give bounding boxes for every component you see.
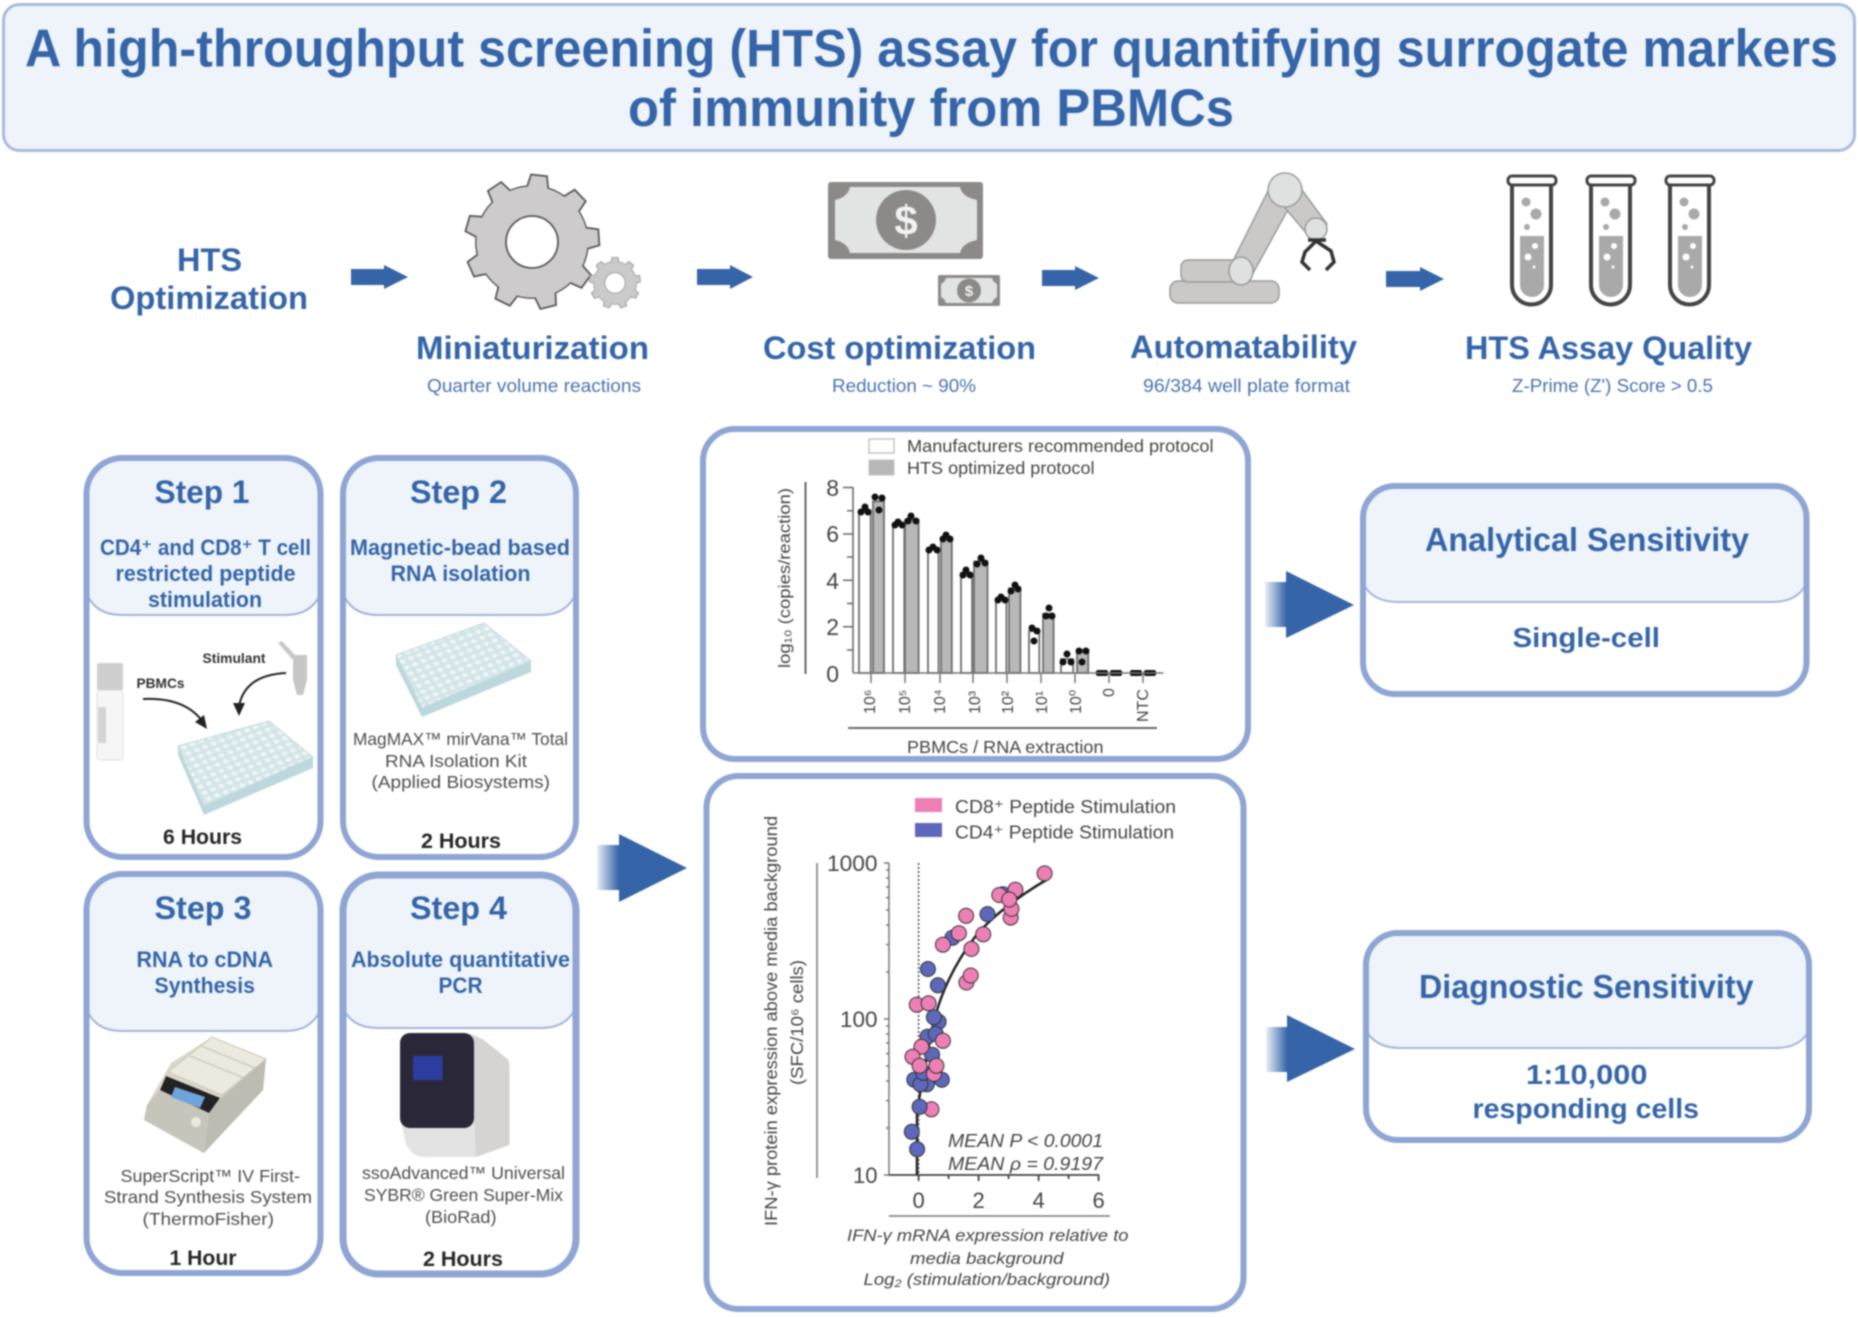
- panel: analytical sensitivity: [1363, 486, 1806, 694]
- CD8 points: [905, 866, 1052, 1117]
- label: Miniaturization: Miniaturization: [416, 330, 649, 366]
- panel: step 3: RNA to cDNA: [136, 947, 273, 972]
- arrow: to analytical sensitivity: [1265, 571, 1354, 638]
- arrow: to diagnostic sensitivity: [1266, 1015, 1355, 1082]
- x axis: NTC: [1135, 689, 1152, 722]
- panel: step 2: Step 2: [410, 474, 507, 510]
- y axis: 2: [826, 614, 839, 640]
- x axis: 6: [1092, 1188, 1105, 1213]
- heading: HTS Optimization: HTS: [177, 242, 242, 278]
- text: cDNA kit: SuperScript™ IV First-: [120, 1166, 300, 1186]
- label: 1 hour: 1 Hour: [170, 1247, 236, 1270]
- panel: step 3: Synthesis: [154, 973, 255, 998]
- title banner: [4, 4, 1854, 150]
- icon: thermal cycler: [144, 1037, 266, 1153]
- label: Cost optimization: Cost optimization: [763, 330, 1036, 366]
- icon: pipette tube: [278, 641, 307, 695]
- x axis: PBMCs / RNA extraction: [907, 737, 1104, 757]
- arrow: steps to charts: [597, 834, 687, 902]
- x axis: IFN-γ mRNA expression relative to: [847, 1226, 1128, 1245]
- statistics: [948, 1131, 1104, 1174]
- panel: analytical sensitivity: Single-cell: [1512, 622, 1660, 653]
- panel: step 2: RNA isolation: [390, 561, 530, 586]
- text: RNA kit: MagMAX™ mirVana™ Total: [353, 729, 568, 749]
- label: Miniaturization: Quarter volume reactions: [427, 376, 641, 396]
- x axis: media background: [910, 1249, 1064, 1268]
- x axis: 10¹: [1034, 691, 1051, 714]
- x axis: 10⁵: [897, 690, 914, 714]
- y axis: 1000: [827, 851, 878, 876]
- y axis: (SFC/10⁶ cells): [787, 960, 807, 1085]
- panel: step 4: [343, 874, 576, 1274]
- bars: [859, 501, 1088, 673]
- heading: HTS Optimization: Optimization: [110, 280, 308, 316]
- panel: step 4: PCR: [438, 973, 483, 998]
- label: HTS Assay Quality: HTS Assay Quality: [1465, 330, 1752, 366]
- arrow: to assay quality: [1386, 267, 1444, 291]
- panel: bar chart: [703, 429, 1248, 759]
- icon: well plate: [178, 721, 313, 815]
- icon: well plate: [396, 623, 531, 717]
- y axis: [775, 475, 853, 687]
- text: PCR kit: SYBR® Green Super-Mix: [364, 1185, 563, 1205]
- statistics: MEAN P < 0.0001: [948, 1131, 1103, 1151]
- x axis: Log₂ (stimulation/background): [864, 1270, 1110, 1289]
- x axis: 10⁰: [1068, 690, 1085, 714]
- panel: scatter chart: [706, 776, 1244, 1309]
- legend: CD8⁺ Peptide Stimulation: [955, 797, 1176, 817]
- label: PBMCs: PBMCs: [136, 675, 185, 691]
- text: cDNA kit: (ThermoFisher): [142, 1209, 274, 1229]
- text: RNA kit: (Applied Biosystems): [372, 772, 550, 792]
- heading: HTS Optimization: [110, 242, 308, 316]
- icon: banknotes: $: [965, 283, 974, 300]
- label: Automatability: Automatability: [1130, 329, 1357, 365]
- text: RNA kit: RNA Isolation Kit: [385, 751, 527, 771]
- panel: step 1: [86, 458, 320, 857]
- zero reference line: [918, 863, 920, 1175]
- panel: step 3: [86, 874, 320, 1273]
- fit curve: [917, 879, 1048, 1175]
- y axis: 6: [826, 521, 839, 547]
- label: 2 hours: 2 Hours: [421, 830, 501, 853]
- arrow: PBMCs to plate: [143, 699, 207, 729]
- panel: diagnostic sensitivity: responding cells: [1472, 1093, 1699, 1124]
- legend: HTS optimized protocol: [907, 458, 1094, 478]
- panel: step 4: Absolute quantitative: [351, 947, 570, 972]
- legend: Manufacturers recommended protocol: [907, 436, 1214, 456]
- arrow: to cost optimization: [697, 265, 753, 289]
- x axis: 0: [912, 1188, 925, 1213]
- x axis: 10⁴: [932, 689, 949, 714]
- icon: gears: [458, 168, 641, 315]
- CD4 points: [904, 887, 1010, 1157]
- text: PCR kit: [362, 1163, 565, 1227]
- panel: analytical sensitivity: Analytical Sensitivity: [1425, 521, 1750, 558]
- y axis: 100: [840, 1007, 878, 1032]
- panel: step 4: Step 4: [410, 890, 507, 926]
- label: HTS Assay Quality: Z-Prime (Z') Score > 0.5: [1512, 376, 1713, 396]
- y axis: 0: [826, 661, 839, 687]
- x axis: 2: [972, 1188, 985, 1213]
- arrow: to miniaturization: [351, 265, 408, 289]
- icon: banknotes: $: [894, 197, 918, 244]
- y axis: IFN-γ protein expression above media background: [761, 816, 781, 1226]
- legend: CD4⁺ Peptide Stimulation: [955, 822, 1174, 842]
- y axis: log₁₀ (copies/reaction): [775, 488, 794, 668]
- panel: step 3: Step 3: [154, 890, 252, 926]
- text: PCR kit: ssoAdvanced™ Universal: [362, 1163, 565, 1183]
- label: 6 hours: 6 Hours: [163, 826, 242, 849]
- panel: step 2: Magnetic-bead based: [350, 535, 570, 560]
- icon: vial: [97, 663, 123, 760]
- legend: [915, 797, 1176, 842]
- label: HTS Assay Quality: [1465, 330, 1752, 396]
- x axis: 10²: [1000, 690, 1017, 714]
- y axis: 8: [826, 475, 839, 501]
- data points: [858, 494, 1156, 676]
- panel: step 1: stimulation: [148, 587, 262, 612]
- x axis: [847, 1175, 1128, 1289]
- label: Cost optimization: Reduction ~ 90%: [832, 376, 976, 396]
- label: Cost optimization: [763, 330, 1036, 396]
- panel: diagnostic sensitivity: [1366, 933, 1809, 1140]
- x axis: 0: [1101, 688, 1118, 697]
- label: Stimulant: Stimulant: [202, 650, 266, 666]
- icon: test tubes: [1508, 176, 1714, 304]
- arrow: to automatability: [1042, 266, 1099, 290]
- icon: banknotes: [828, 182, 1000, 306]
- x axis: 4: [1032, 1188, 1045, 1213]
- icon: qPCR machine: [400, 1033, 510, 1157]
- icon: robot arm: [1170, 173, 1334, 303]
- label: 2 hours: 2 Hours: [423, 1248, 503, 1271]
- title banner: of immunity from PBMCs: [628, 79, 1234, 138]
- x axis: 10⁶: [862, 690, 879, 714]
- x axis: 10³: [967, 690, 984, 714]
- extra CD4 point: [912, 1099, 927, 1114]
- y axis: 10: [853, 1163, 878, 1188]
- arrow: stimulant to plate: [233, 673, 286, 716]
- panel: step 1: CD4⁺ and CD8⁺ T cell: [100, 535, 311, 560]
- panel: step 1: Step 1: [154, 474, 250, 510]
- statistics: MEAN ρ = 0.9197: [948, 1154, 1104, 1174]
- label: Automatability: 96/384 well plate format: [1143, 376, 1350, 396]
- panel: step 1: restricted peptide: [116, 561, 296, 586]
- label: Miniaturization: [416, 330, 649, 396]
- x axis: [848, 673, 1164, 757]
- y axis: 4: [826, 568, 839, 594]
- panel: step 2: [343, 458, 576, 857]
- text: PCR kit: (BioRad): [425, 1207, 496, 1227]
- panel: diagnostic sensitivity: Diagnostic Sensitivity: [1419, 968, 1754, 1005]
- y axis: [761, 816, 889, 1226]
- text: RNA kit: [353, 729, 568, 792]
- legend: [869, 436, 1214, 478]
- label: Automatability: [1130, 329, 1357, 396]
- text: cDNA kit: [104, 1166, 312, 1229]
- panel: diagnostic sensitivity: 1:10,000: [1526, 1059, 1648, 1090]
- text: cDNA kit: Strand Synthesis System: [104, 1187, 312, 1207]
